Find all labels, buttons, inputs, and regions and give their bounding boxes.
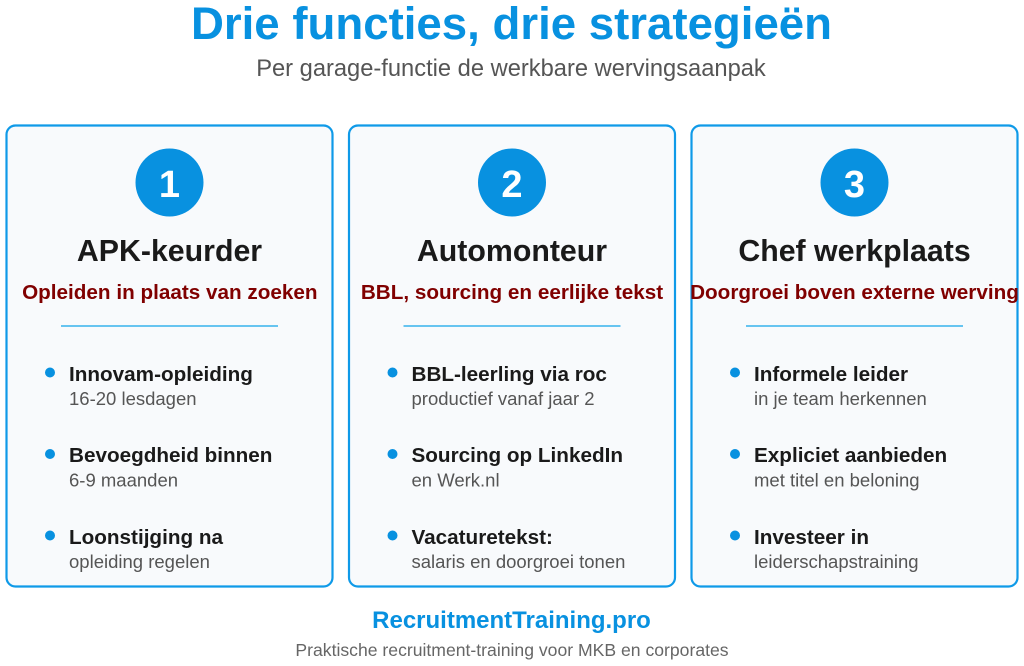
list item: Sourcing op LinkedIn: Sourcing op LinkedIn bbox=[412, 444, 623, 467]
list item: Expliciet aanbieden: Expliciet aanbieden bbox=[754, 444, 947, 467]
list item: Loonstijging na: Loonstijging na bbox=[69, 526, 223, 549]
list item: Informele leider: in je team herkennen bbox=[754, 388, 927, 409]
list item: Innovam-opleiding: 16-20 lesdagen bbox=[69, 388, 197, 409]
heading: APK-keurder: APK-keurder bbox=[77, 235, 262, 268]
list item: Sourcing op LinkedIn bbox=[388, 444, 623, 490]
heading: Automonteur: Automonteur bbox=[417, 235, 607, 268]
list item: Sourcing op LinkedIn: en Werk.nl bbox=[412, 470, 500, 490]
panel: Chef werkplaats bbox=[690, 126, 1019, 586]
panel: Automonteur bbox=[349, 126, 675, 586]
icon: number 3: 3 bbox=[844, 164, 865, 206]
list item: Investeer in: Investeer in bbox=[754, 526, 869, 549]
list item: BBL-leerling via roc bbox=[388, 363, 607, 409]
list item: Expliciet aanbieden: met titel en beloning bbox=[754, 470, 920, 490]
list item: BBL-leerling via roc: BBL-leerling via roc bbox=[412, 363, 607, 386]
list item: Informele leider bbox=[730, 363, 927, 409]
strategy: Chef werkplaats: Doorgroei boven externe werving bbox=[690, 281, 1019, 304]
icon: number 2: 2 bbox=[501, 164, 523, 206]
list item: Investeer in bbox=[730, 526, 919, 572]
list item: Loonstijging na bbox=[45, 526, 223, 572]
icon: number 2 bbox=[478, 148, 546, 216]
list item: Expliciet aanbieden bbox=[730, 444, 947, 490]
subtitle: Per garage-functie de werkbare wervingsaanpak bbox=[256, 56, 766, 82]
panel: APK-keurder bbox=[6, 126, 332, 586]
icon: number 3 bbox=[820, 148, 888, 216]
list item: Bevoegdheid binnen: 6-9 maanden bbox=[69, 470, 178, 490]
strategy: APK-keurder: Opleiden in plaats van zoeken bbox=[22, 281, 318, 304]
list item: Innovam-opleiding bbox=[45, 363, 253, 409]
list item: Informele leider: Informele leider bbox=[754, 363, 908, 386]
list item: Investeer in: leiderschapstraining bbox=[754, 551, 919, 572]
icon: number 1 bbox=[136, 148, 204, 216]
list item: Loonstijging na: opleiding regelen bbox=[69, 551, 210, 572]
list item: Bevoegdheid binnen bbox=[45, 444, 272, 490]
icon: number 1: 1 bbox=[159, 164, 180, 206]
list item: Vacaturetekst: Vacaturetekst: bbox=[412, 526, 553, 549]
footer brand: RecruitmentTraining.pro bbox=[372, 607, 651, 634]
list item: BBL-leerling via roc: productief vanaf jaar 2 bbox=[412, 388, 595, 409]
list item: Vacaturetekst bbox=[388, 526, 625, 572]
list item: Vacaturetekst: salaris en doorgroei tonen bbox=[412, 551, 625, 572]
heading: Chef werkplaats: Chef werkplaats bbox=[738, 235, 971, 268]
list item: Innovam-opleiding: Innovam-opleiding bbox=[69, 363, 253, 386]
footer tagline: Praktische recruitment-training voor MKB en corporates bbox=[295, 640, 729, 660]
list item: Bevoegdheid binnen: Bevoegdheid binnen bbox=[69, 444, 272, 467]
strategy: Automonteur: BBL, sourcing en eerlijke tekst bbox=[361, 281, 663, 304]
